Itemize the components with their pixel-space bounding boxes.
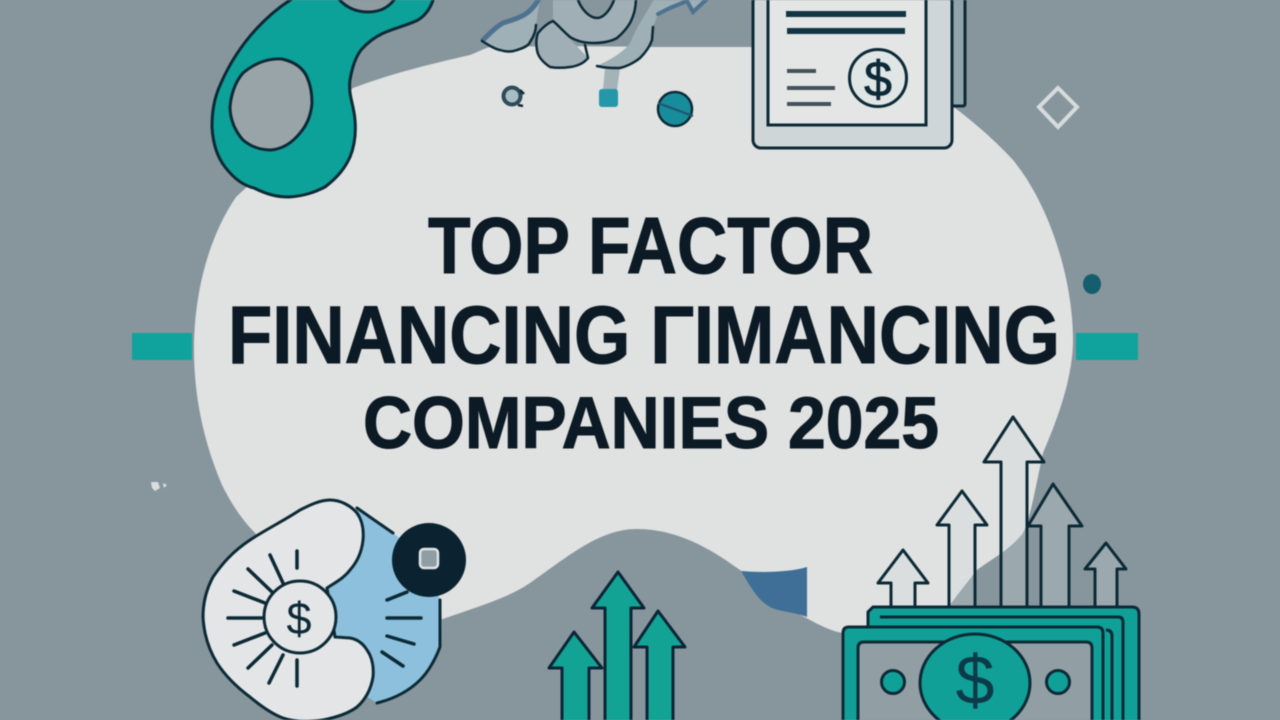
coin circle bbox=[264, 581, 336, 653]
icon: invoice document bbox=[753, 0, 965, 148]
back notes bbox=[868, 607, 1139, 720]
icon: coin with rays bbox=[203, 500, 466, 720]
teal bar right bbox=[1076, 333, 1138, 360]
blue accent shape bbox=[741, 567, 807, 617]
teal bar left bbox=[132, 333, 192, 360]
title bbox=[228, 201, 1060, 464]
front note bbox=[843, 627, 1103, 720]
coin circle: $ bbox=[286, 593, 312, 644]
small dot ornament bbox=[504, 88, 524, 106]
teal square ornament bbox=[599, 89, 618, 107]
teal arrows bottom center bbox=[549, 572, 685, 720]
note centre medallion bbox=[920, 634, 1030, 720]
teal dot right bbox=[1083, 274, 1101, 294]
arrow tall bbox=[592, 572, 644, 720]
growth arrow 5 bbox=[1085, 543, 1126, 607]
coin blue back bbox=[300, 508, 442, 703]
document heading lines bbox=[786, 11, 906, 34]
growth arrow 3 bbox=[984, 417, 1044, 607]
document dollar seal: $ bbox=[864, 51, 892, 107]
title line 1: TOP FACTOR bbox=[428, 201, 873, 290]
loop top hole bbox=[337, 0, 396, 12]
bull body fragment bbox=[536, 0, 636, 68]
coin rays bbox=[228, 551, 421, 686]
growth arrow 4 bbox=[1028, 484, 1082, 607]
teal circle ornament bbox=[658, 92, 693, 126]
arrow right bbox=[634, 611, 685, 720]
teal loop shape bbox=[212, 0, 434, 197]
black badge bbox=[392, 523, 466, 597]
icon: diamond sparkle bbox=[1039, 88, 1077, 127]
note centre medallion: $ bbox=[956, 641, 994, 719]
bull left fragment bbox=[482, 0, 540, 52]
loop hole bbox=[230, 59, 312, 150]
note right dot bbox=[1046, 670, 1070, 694]
bull figure fragments bbox=[482, 0, 708, 90]
outlined growth arrows bbox=[878, 417, 1126, 607]
growth arrow 1 bbox=[878, 550, 928, 607]
background blob bbox=[194, 46, 1073, 640]
title line 3: COMPANIES 2025 bbox=[363, 383, 939, 464]
growth arrow 2 bbox=[937, 491, 987, 607]
note left dot bbox=[882, 670, 904, 694]
speck left bbox=[151, 482, 167, 491]
arrow small bbox=[549, 632, 602, 720]
coin pale front bbox=[203, 500, 373, 720]
icon: stack of banknotes bbox=[843, 607, 1139, 720]
title line 2: FINANCING ΓIMANCING bbox=[228, 290, 1060, 381]
document dollar seal bbox=[850, 50, 906, 107]
bull leg fragment bbox=[603, 68, 620, 90]
document text lines bbox=[787, 69, 835, 106]
note panel bbox=[858, 642, 1092, 720]
document page bbox=[768, 0, 926, 125]
